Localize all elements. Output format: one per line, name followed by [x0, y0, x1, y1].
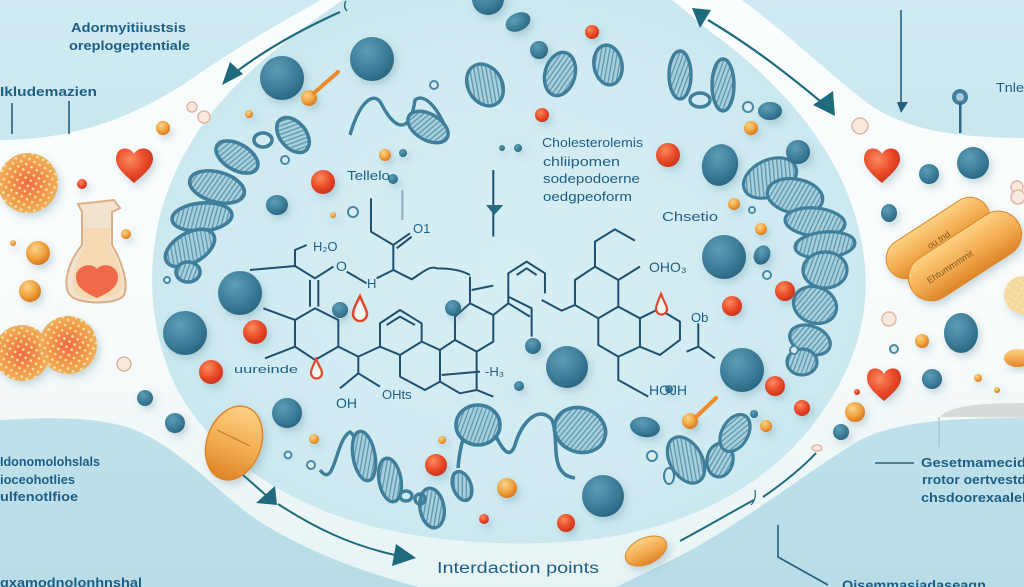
- icon: small cell clusters: [117, 102, 1024, 451]
- label: top left note: [69, 21, 190, 53]
- label: molecule annotations: [234, 168, 718, 411]
- label: left upper: Ikludemazien: [0, 85, 97, 99]
- helix: top: [350, 43, 734, 149]
- helix: bottom centre: [456, 400, 612, 478]
- label: lower right note: chsdoorexaalel: [921, 490, 1024, 505]
- label: top right: Tnle: [996, 80, 1024, 95]
- label: molecule annotations: O1: [413, 221, 430, 236]
- label: lower left note: Idonomolohslals: [0, 455, 100, 469]
- blue spheres: [137, 0, 989, 517]
- icon: flask with heart: [66, 200, 126, 302]
- label: centre note: [542, 136, 643, 204]
- label: molecule annotations: O: [336, 258, 347, 274]
- icon: capsule pair: Ehtummmmit: [925, 248, 975, 286]
- orange spheres: [10, 90, 1000, 498]
- icon: raspberry sphere right: [1004, 276, 1024, 314]
- label: top left note: oreplogeptentiale: [69, 39, 190, 53]
- ribbon shaded edge: [940, 403, 1024, 418]
- orange tailed sticks: [314, 72, 716, 417]
- molecule diagram: [250, 170, 715, 397]
- icons: water drops: [311, 294, 667, 378]
- label: top left note: Adormyitiiustsis: [71, 21, 186, 35]
- label: lower right note: [921, 455, 1024, 505]
- helix: bottom left: [320, 429, 476, 530]
- helix: left: [159, 111, 316, 282]
- icon: heart top right: [864, 149, 900, 183]
- label: centre note: chliipomen: [543, 155, 620, 169]
- label: centre note: oedgpeoform: [543, 190, 632, 204]
- label: molecule annotations: uureinde: [234, 364, 298, 376]
- label: molecule annotations: H: [367, 276, 376, 291]
- icon: pin probe: [952, 89, 968, 133]
- label: molecule annotations: Tellelo: [347, 168, 390, 183]
- label: lower left note: ulfenotlfioe: [0, 490, 78, 504]
- label: centre note: Cholesterolemis: [542, 136, 643, 150]
- label: molecule annotations: H₂O: [313, 239, 338, 254]
- icon: heart top left: [116, 149, 153, 183]
- icon: raspberry spheres left: [0, 153, 97, 381]
- label: molecule annotations: OH: [336, 395, 357, 411]
- helix: right: [737, 150, 856, 375]
- icon: capsule pair: [878, 190, 1024, 310]
- label: molecule annotations: OHts: [382, 387, 412, 402]
- arrow: top left: [222, 1, 347, 85]
- central oval: [152, 0, 866, 543]
- label: molecule annotations: OHO₃: [649, 259, 687, 275]
- label: interaction points: Interdaction points: [437, 560, 599, 577]
- small rings: [164, 81, 898, 469]
- icon: oval tablet left: [196, 398, 272, 488]
- helix: bottom right: [660, 409, 756, 490]
- label: lower right note: rrotor oertvestd: [922, 472, 1024, 487]
- arrow: bottom left: [243, 475, 416, 566]
- icon: oval tablet right edge: [1004, 349, 1024, 367]
- icon: heart lower right: [867, 368, 901, 401]
- label: lower left note: ioceohotlies: [0, 473, 75, 487]
- label: molecule annotations: HOJH: [649, 382, 687, 398]
- label: molecule annotations: Ob: [691, 310, 708, 325]
- red spheres: [77, 25, 860, 532]
- arrow: top right: [692, 8, 835, 116]
- icon: capsule pair: ou tnd: [925, 229, 952, 251]
- label: molecule annotations: -H₃: [485, 364, 504, 379]
- icon: oval tablet bottom: [621, 530, 671, 572]
- label: lower left note: [0, 455, 100, 504]
- label: lower right note: Gesetmamecid: [921, 455, 1024, 470]
- label: molecule annotations: Chsetio: [662, 209, 718, 224]
- arrow: bottom right: [680, 453, 816, 541]
- label: centre note: sodepodoerne: [543, 172, 640, 186]
